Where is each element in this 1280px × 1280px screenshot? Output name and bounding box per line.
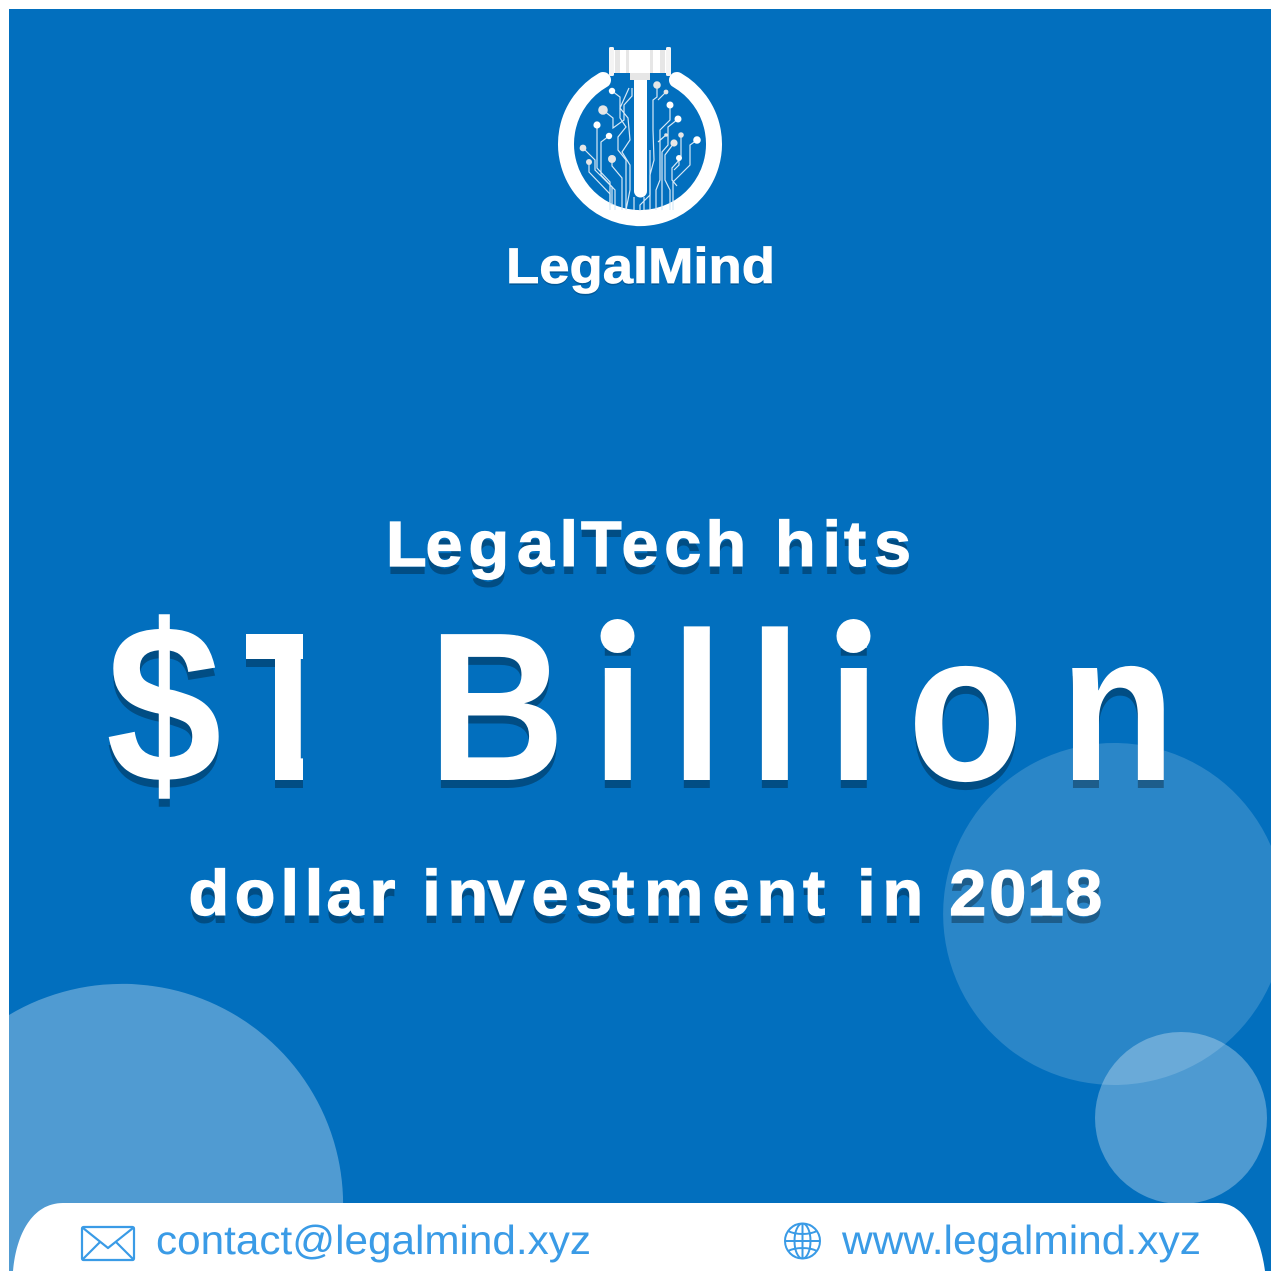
headline shadow: $ [106, 586, 222, 839]
heading line 1: LegalTech hits [386, 508, 911, 580]
logo circuit traces [583, 85, 697, 210]
logo wordmark: LegalMind [506, 238, 775, 294]
headline: $1 Billion: 1 [229, 590, 337, 826]
icon: globe [785, 1224, 820, 1258]
headline: $1 Billion: $ [106, 578, 222, 831]
logo: gavel and circuit ring [566, 47, 714, 218]
heading line 1 shadow: LegalTech hits [386, 516, 911, 588]
logo ring [566, 80, 714, 218]
subheading: dollar investment in 2018 [188, 857, 1102, 929]
gavel [609, 47, 671, 198]
headline shadow [108, 622, 1164, 807]
contact email: contact@legalmind.xyz [156, 1217, 591, 1263]
headline shadow: 1 [229, 598, 337, 834]
decorative circles [9, 743, 1271, 1271]
logo wordmark shadow: LegalMind [506, 240, 775, 296]
website url: www.legalmind.xyz [841, 1217, 1201, 1263]
headline: $1 Billion [108, 614, 1164, 799]
subheading shadow: dollar investment in 2018 [188, 865, 1102, 937]
headline: $1 Billion: Billion [428, 588, 1176, 825]
logo circuit nodes [580, 81, 701, 165]
icon: envelope [82, 1227, 134, 1260]
headline shadow: Billion [428, 596, 1176, 833]
panel: contact footer [13, 1203, 1265, 1271]
